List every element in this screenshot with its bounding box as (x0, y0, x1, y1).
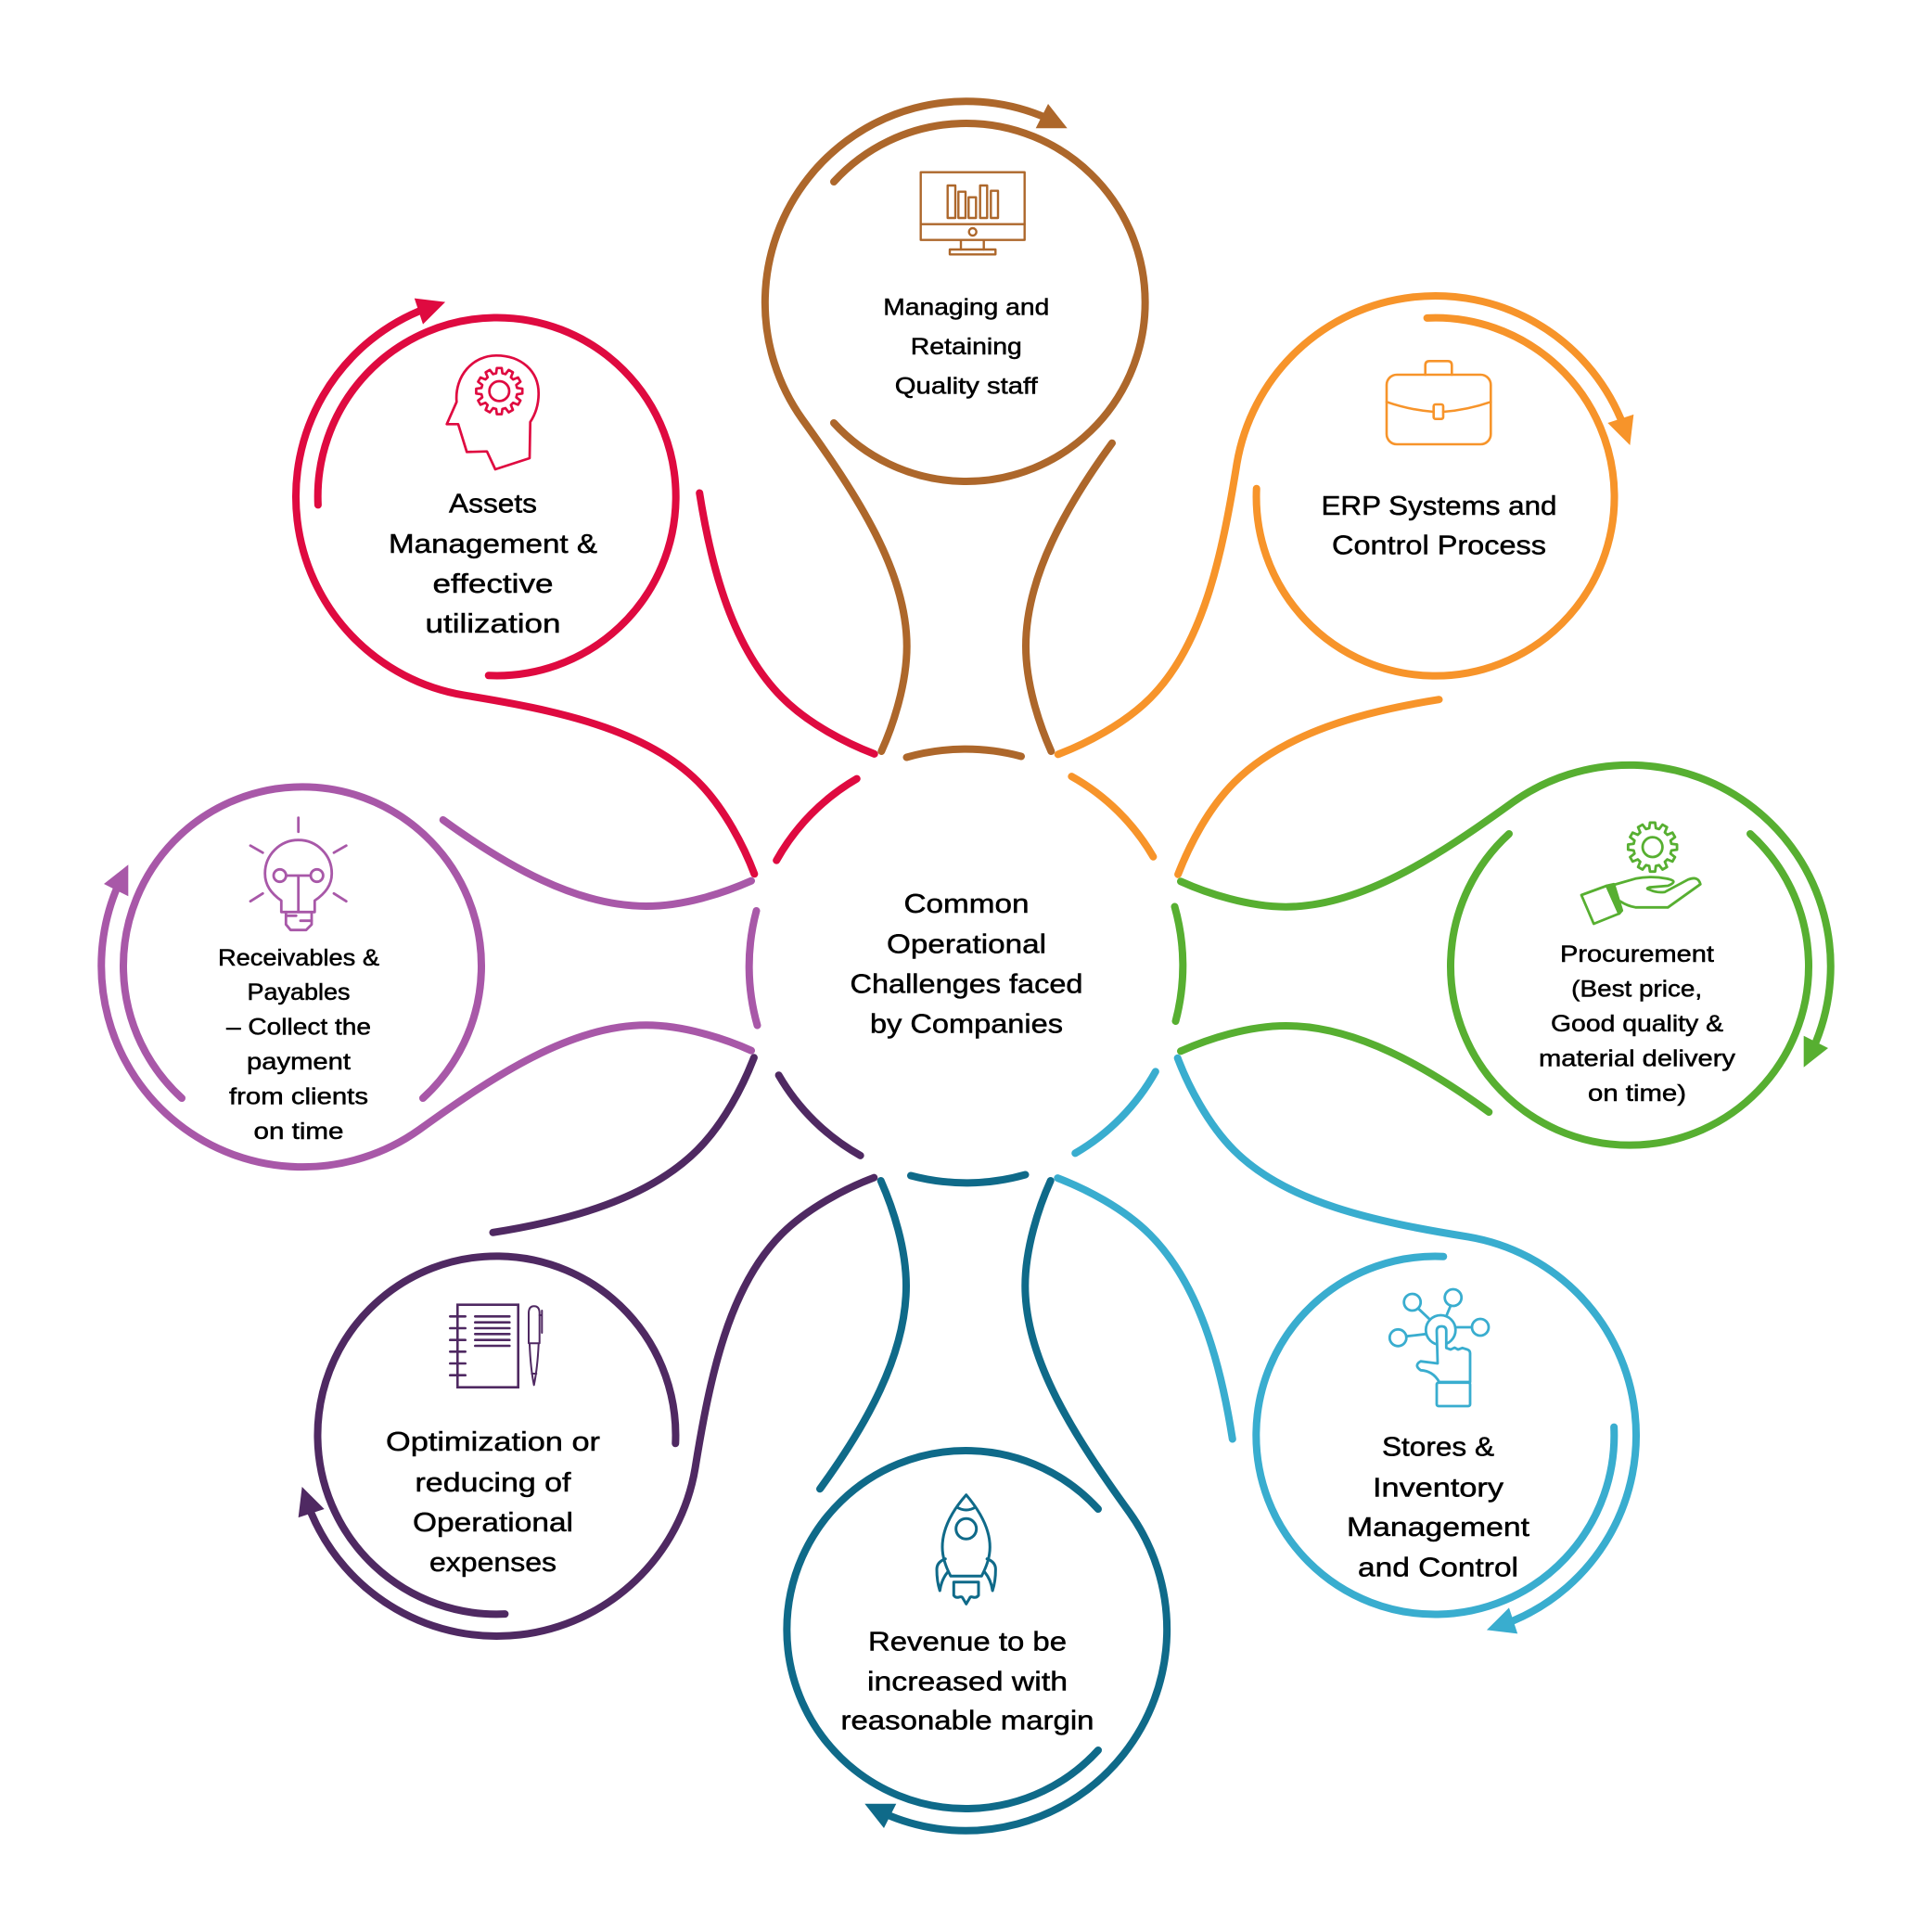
label: Managing and (883, 294, 1049, 320)
label: expenses (429, 1548, 557, 1578)
label: effective (432, 569, 553, 599)
title: centre heading: Common (903, 889, 1030, 919)
label: Management (1347, 1513, 1529, 1542)
label: Control Process (1332, 531, 1546, 561)
icon: head with gear (447, 355, 539, 469)
title: centre heading: Challenges faced (850, 970, 1083, 1000)
petal outline: dark purple (228, 987, 961, 1720)
panel: ERP Systems and Control Process (971, 212, 1704, 945)
petal outline: brown (765, 101, 1145, 757)
label (389, 490, 597, 639)
icon: rocket (937, 1495, 995, 1604)
label: reasonable margin (840, 1706, 1094, 1735)
label: reducing of (416, 1468, 572, 1498)
label: Good quality & (1551, 1011, 1723, 1037)
icon: light bulb (250, 818, 346, 930)
label: (Best price, (1571, 976, 1702, 1002)
panel: Receivables & Payables (101, 787, 757, 1167)
label: Receivables & (218, 945, 379, 971)
petal outline: red (212, 228, 945, 961)
label: Management & (389, 530, 597, 559)
label: on time (254, 1119, 343, 1145)
label: Inventory (1373, 1473, 1504, 1503)
petal outline: light purple (101, 787, 757, 1167)
panel: Procurement (1174, 765, 1831, 1145)
label: material delivery (1539, 1046, 1736, 1072)
label: ERP Systems and (1321, 492, 1556, 521)
label: on time) (1588, 1081, 1686, 1107)
title: centre heading: Operational (887, 929, 1046, 959)
label: and Control (1358, 1553, 1518, 1582)
label (883, 294, 1049, 400)
label: Payables (247, 979, 351, 1005)
label: Revenue to be (868, 1627, 1067, 1657)
label (1539, 941, 1736, 1107)
petal outline: orange (971, 212, 1704, 945)
label (1347, 1432, 1529, 1582)
petal outline: teal (787, 1174, 1167, 1831)
label: – Collect the (226, 1015, 371, 1041)
label: Procurement (1560, 941, 1714, 967)
icon: briefcase (1387, 361, 1491, 444)
label: from clients (229, 1083, 368, 1109)
label: payment (247, 1049, 351, 1075)
label: Stores & (1382, 1432, 1494, 1462)
icon: computer monitor with bar chart (921, 173, 1025, 254)
label (386, 1427, 600, 1578)
title: centre heading (850, 889, 1083, 1039)
label: Operational (413, 1508, 573, 1538)
label: increased with (867, 1667, 1068, 1696)
label: Quality staff (895, 374, 1038, 400)
label (1321, 492, 1556, 561)
label: Optimization or (386, 1427, 600, 1457)
label: Retaining (911, 334, 1022, 360)
panel: Revenue to be increased with reasonable margin (787, 1174, 1167, 1831)
label (840, 1627, 1094, 1735)
label: Assets (449, 490, 537, 519)
title: centre heading: by Companies (870, 1009, 1063, 1039)
icon: notebook and pen (450, 1305, 542, 1388)
panel: Stores & Inventory Management and Control (987, 971, 1720, 1704)
icon: hand touching network nodes (1389, 1289, 1489, 1406)
panel: Assets Management & effective utilization (212, 228, 945, 961)
label (218, 945, 379, 1145)
petal outline: cyan (987, 971, 1720, 1704)
icon: hand holding gear (1581, 823, 1700, 924)
panel: Optimization or reducing of Operational expenses (228, 987, 961, 1720)
label: utilization (425, 609, 560, 639)
panel: Managing and Retaining Quality staff (765, 101, 1145, 757)
petal outline: green (1174, 765, 1831, 1145)
